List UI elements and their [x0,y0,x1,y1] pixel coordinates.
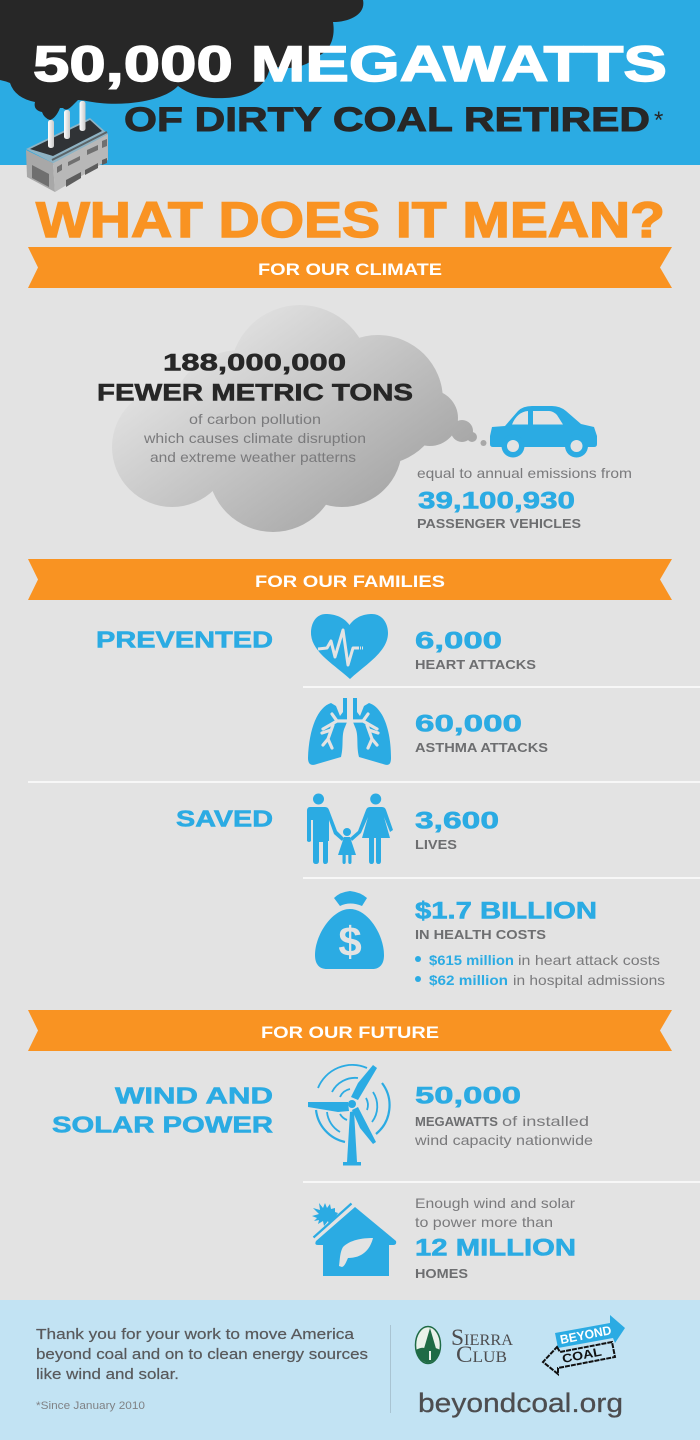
stat: homes: HOMES [415,1266,468,1281]
stat: health costs: $1.7 BILLION [415,898,597,924]
stat: lives: LIVES [415,837,457,852]
title line 1: 50,000 MEGAWATTS [33,36,667,92]
ribbon: for our climate: FOR OUR CLIMATE [258,260,442,279]
logo: sierra club: CLUB [456,1342,507,1367]
website: beyondcoal.org [418,1388,623,1418]
icon: wind turbine [308,1065,390,1166]
stat: health costs [415,898,665,988]
icon: coal factory [26,101,108,192]
bullet: heart attack costs [415,952,660,968]
icon: money bag: $ [338,918,362,965]
stat: homes: to power more than [415,1214,553,1230]
heading: wind and solar power: WIND AND [115,1082,273,1108]
stat: wind capacity: wind capacity nationwide [414,1132,593,1148]
ribbon: for our families [28,559,672,600]
title line 2: * [654,107,663,134]
thank you text [36,1327,368,1383]
thank you text: beyond coal and on to clean energy sources [36,1347,368,1363]
stat: heart attacks [415,628,536,672]
icon: family [307,794,393,864]
ribbon: for our future: FOR OUR FUTURE [261,1023,439,1042]
stat: wind capacity: of installed [502,1113,589,1129]
heading: wind and solar power [52,1082,273,1138]
stat: wind capacity [414,1082,593,1148]
stat: passenger vehicles [417,465,632,531]
stat: passenger vehicles: equal to annual emissions from [417,465,632,481]
stat: passenger vehicles: 39,100,930 [418,488,575,514]
stat: metric tons [97,350,413,406]
bullet: hospital admissions [415,972,665,988]
right lung [351,698,391,765]
bullet: hospital admissions: in hospital admissions [513,972,665,988]
thank you text: Thank you for your work to move America [36,1327,355,1343]
grey smoke cloud [112,305,486,532]
heading: wind and solar power: SOLAR POWER [52,1112,273,1138]
heading: what does it mean: WHAT DOES IT MEAN? [36,192,665,248]
stat: metric tons: FEWER METRIC TONS [97,380,413,406]
panel: climate [97,305,632,532]
logo: sierra club [416,1325,513,1367]
stat: passenger vehicles: PASSENGER VEHICLES [417,516,581,531]
footnote: *Since January 2010 [36,1400,145,1412]
icon: lungs [308,698,391,765]
heading: saved: SAVED [176,806,273,832]
logo: beyond coal: COAL [561,1345,603,1366]
text: carbon pollution description: and extreme weather patterns [150,449,356,465]
heading: prevented: PREVENTED [96,626,273,652]
stat: heart attacks: HEART ATTACKS [415,657,536,672]
icon: solar house [312,1203,396,1276]
ribbon: for our future [28,1010,672,1051]
icon: money bag [315,891,384,969]
stat: asthma attacks: 60,000 [415,710,522,738]
stat: metric tons: 188,000,000 [163,350,346,376]
stat: lives: 3,600 [415,808,499,834]
ribbon: for our climate [28,247,672,288]
stat: lives [415,808,499,852]
text: carbon pollution description: which causes climate disruption [143,430,366,446]
text: carbon pollution description [143,411,366,465]
logo: beyond coal: BEYOND [559,1323,613,1347]
thank you text: like wind and solar. [36,1367,179,1383]
logo: sierra club: SIERRA [451,1325,513,1350]
bullet: hospital admissions: $62 million [429,972,508,988]
ribbon: for our families: FOR OUR FAMILIES [255,572,445,591]
black smoke cloud [0,0,363,120]
bullet: heart attack costs: $615 million [429,952,514,968]
title line 2: OF DIRTY COAL RETIRED [124,101,650,139]
bullet: heart attack costs: in heart attack costs [518,952,660,968]
header panel [0,0,700,192]
logo: beyond coal [543,1315,625,1374]
stat: homes: Enough wind and solar [415,1195,575,1211]
stat: heart attacks: 6,000 [415,628,502,654]
icon: car [490,406,597,458]
icon: heart [311,614,388,679]
stat: homes [415,1195,576,1281]
stat: wind capacity: MEGAWATTS [415,1114,498,1129]
text: carbon pollution description: of carbon pollution [189,411,321,427]
footer panel [0,1300,700,1440]
stat: asthma attacks [415,710,548,755]
stat: asthma attacks: ASTHMA ATTACKS [415,740,548,755]
stat: homes: 12 MILLION [415,1234,576,1262]
left lung [308,698,349,765]
stat: wind capacity: 50,000 [415,1082,521,1110]
stat: health costs: IN HEALTH COSTS [415,927,546,942]
